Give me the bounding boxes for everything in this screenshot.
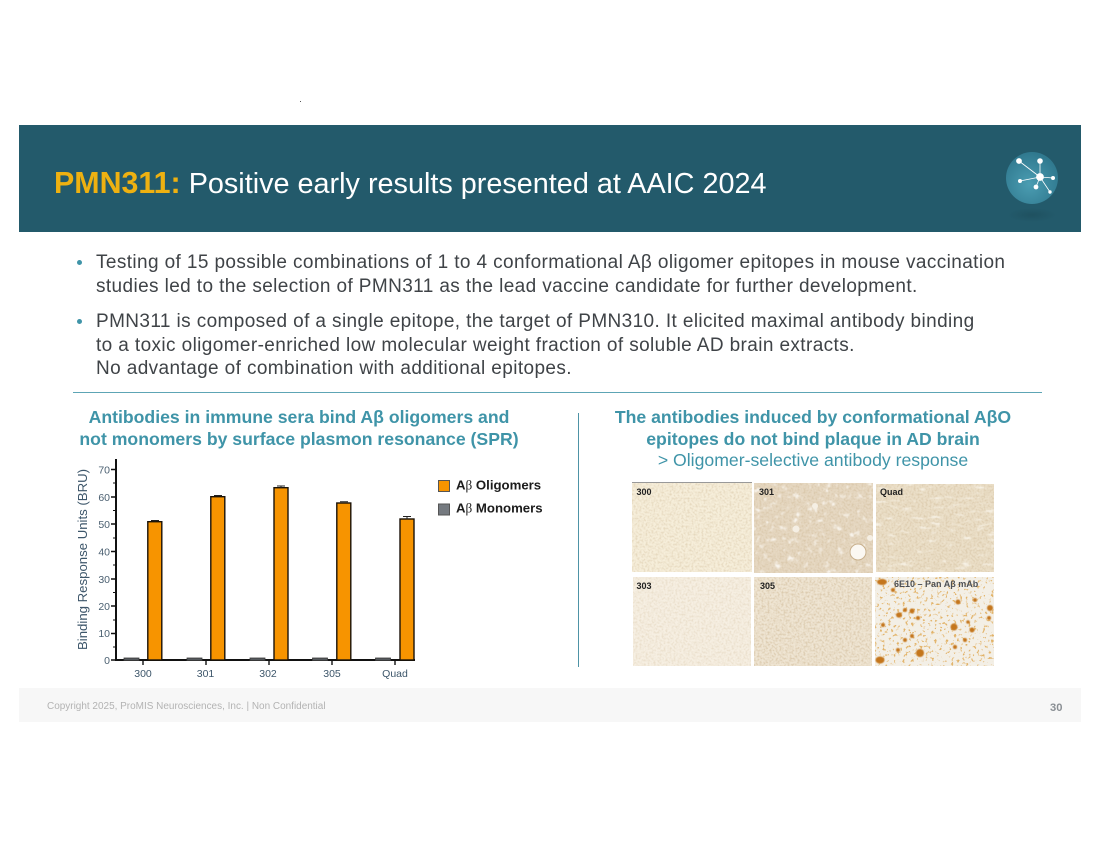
bar chart: 301 (197, 668, 214, 680)
y axis: 0 (104, 655, 110, 667)
image 300: 300 (636, 487, 652, 497)
left chart heading: Antibodies in immune sera bind Aβ oligomers and (89, 407, 509, 427)
image 300 (632, 482, 752, 572)
y axis: 40 (98, 546, 110, 558)
y axis: 10 (98, 628, 110, 640)
bar chart: Quad (382, 668, 408, 680)
bullet 1: studies led to the selection of PMN311 as the lead vaccine candidate for further development. (96, 276, 918, 297)
histology image panel (632, 482, 994, 666)
bullet 1 (77, 252, 1005, 297)
page number: 30 (1050, 702, 1062, 714)
right heading: The antibodies induced by conformational AβO (615, 407, 1011, 427)
bullet 2: to a toxic oligomer-enriched low molecular weight fraction of soluble AD brain extracts. (96, 335, 855, 356)
y axis (98, 459, 415, 667)
bullet 1: Testing of 15 possible combinations of 1 to 4 conformational Aβ oligomer epitopes in mouse vaccination (96, 252, 1005, 273)
image Quad (876, 484, 994, 572)
image 303 (633, 577, 751, 666)
bar chart (75, 459, 543, 680)
monomer bars (124, 658, 390, 660)
image 301 (754, 483, 873, 573)
legend (438, 478, 543, 516)
legend: Aβ Monomers (456, 500, 543, 516)
y axis: 30 (98, 574, 110, 586)
x axis ticks and labels (143, 660, 395, 665)
image 301: 301 (759, 487, 774, 497)
icon: network sphere (1006, 152, 1058, 216)
y axis: 20 (98, 601, 110, 613)
bullet 2: No advantage of combination with additional epitopes. (96, 358, 572, 379)
footer band (19, 688, 1081, 722)
y axis title: Binding Response Units (BRU) (75, 469, 90, 650)
bar chart: 302 (259, 668, 277, 680)
right heading: epitopes do not bind plaque in AD brain (646, 428, 980, 448)
left chart heading (79, 407, 519, 448)
right heading (615, 407, 1011, 470)
copyright: Copyright 2025, ProMIS Neurosciences, Inc. | Non Confidential (47, 701, 326, 712)
bullet 2 (77, 311, 975, 379)
error bars (151, 486, 411, 522)
image Quad: Quad (880, 487, 903, 497)
right heading: > Oligomer-selective antibody response (658, 450, 968, 470)
image 6E10 plaques (875, 577, 994, 666)
y axis: 70 (98, 464, 110, 476)
title: PMN311: Positive early results presented at AAIC 2024 (54, 166, 767, 200)
left chart heading: not monomers by surface plasmon resonance (SPR) (79, 428, 519, 448)
oligomer bars (148, 488, 414, 660)
image 303: 303 (636, 581, 652, 591)
image 305 (754, 577, 872, 666)
legend: Aβ Oligomers (456, 478, 541, 492)
image 305: 305 (760, 581, 775, 591)
y axis: 50 (98, 519, 110, 531)
header band (19, 125, 1081, 232)
image 6E10 plaques: 6E10 – Pan Aβ mAb (894, 579, 979, 589)
bar chart: 305 (323, 668, 341, 680)
bar chart: 300 (134, 668, 152, 680)
y axis: 60 (98, 492, 110, 504)
bullet 2: PMN311 is composed of a single epitope, the target of PMN310. It elicited maximal antibody binding (96, 311, 975, 332)
